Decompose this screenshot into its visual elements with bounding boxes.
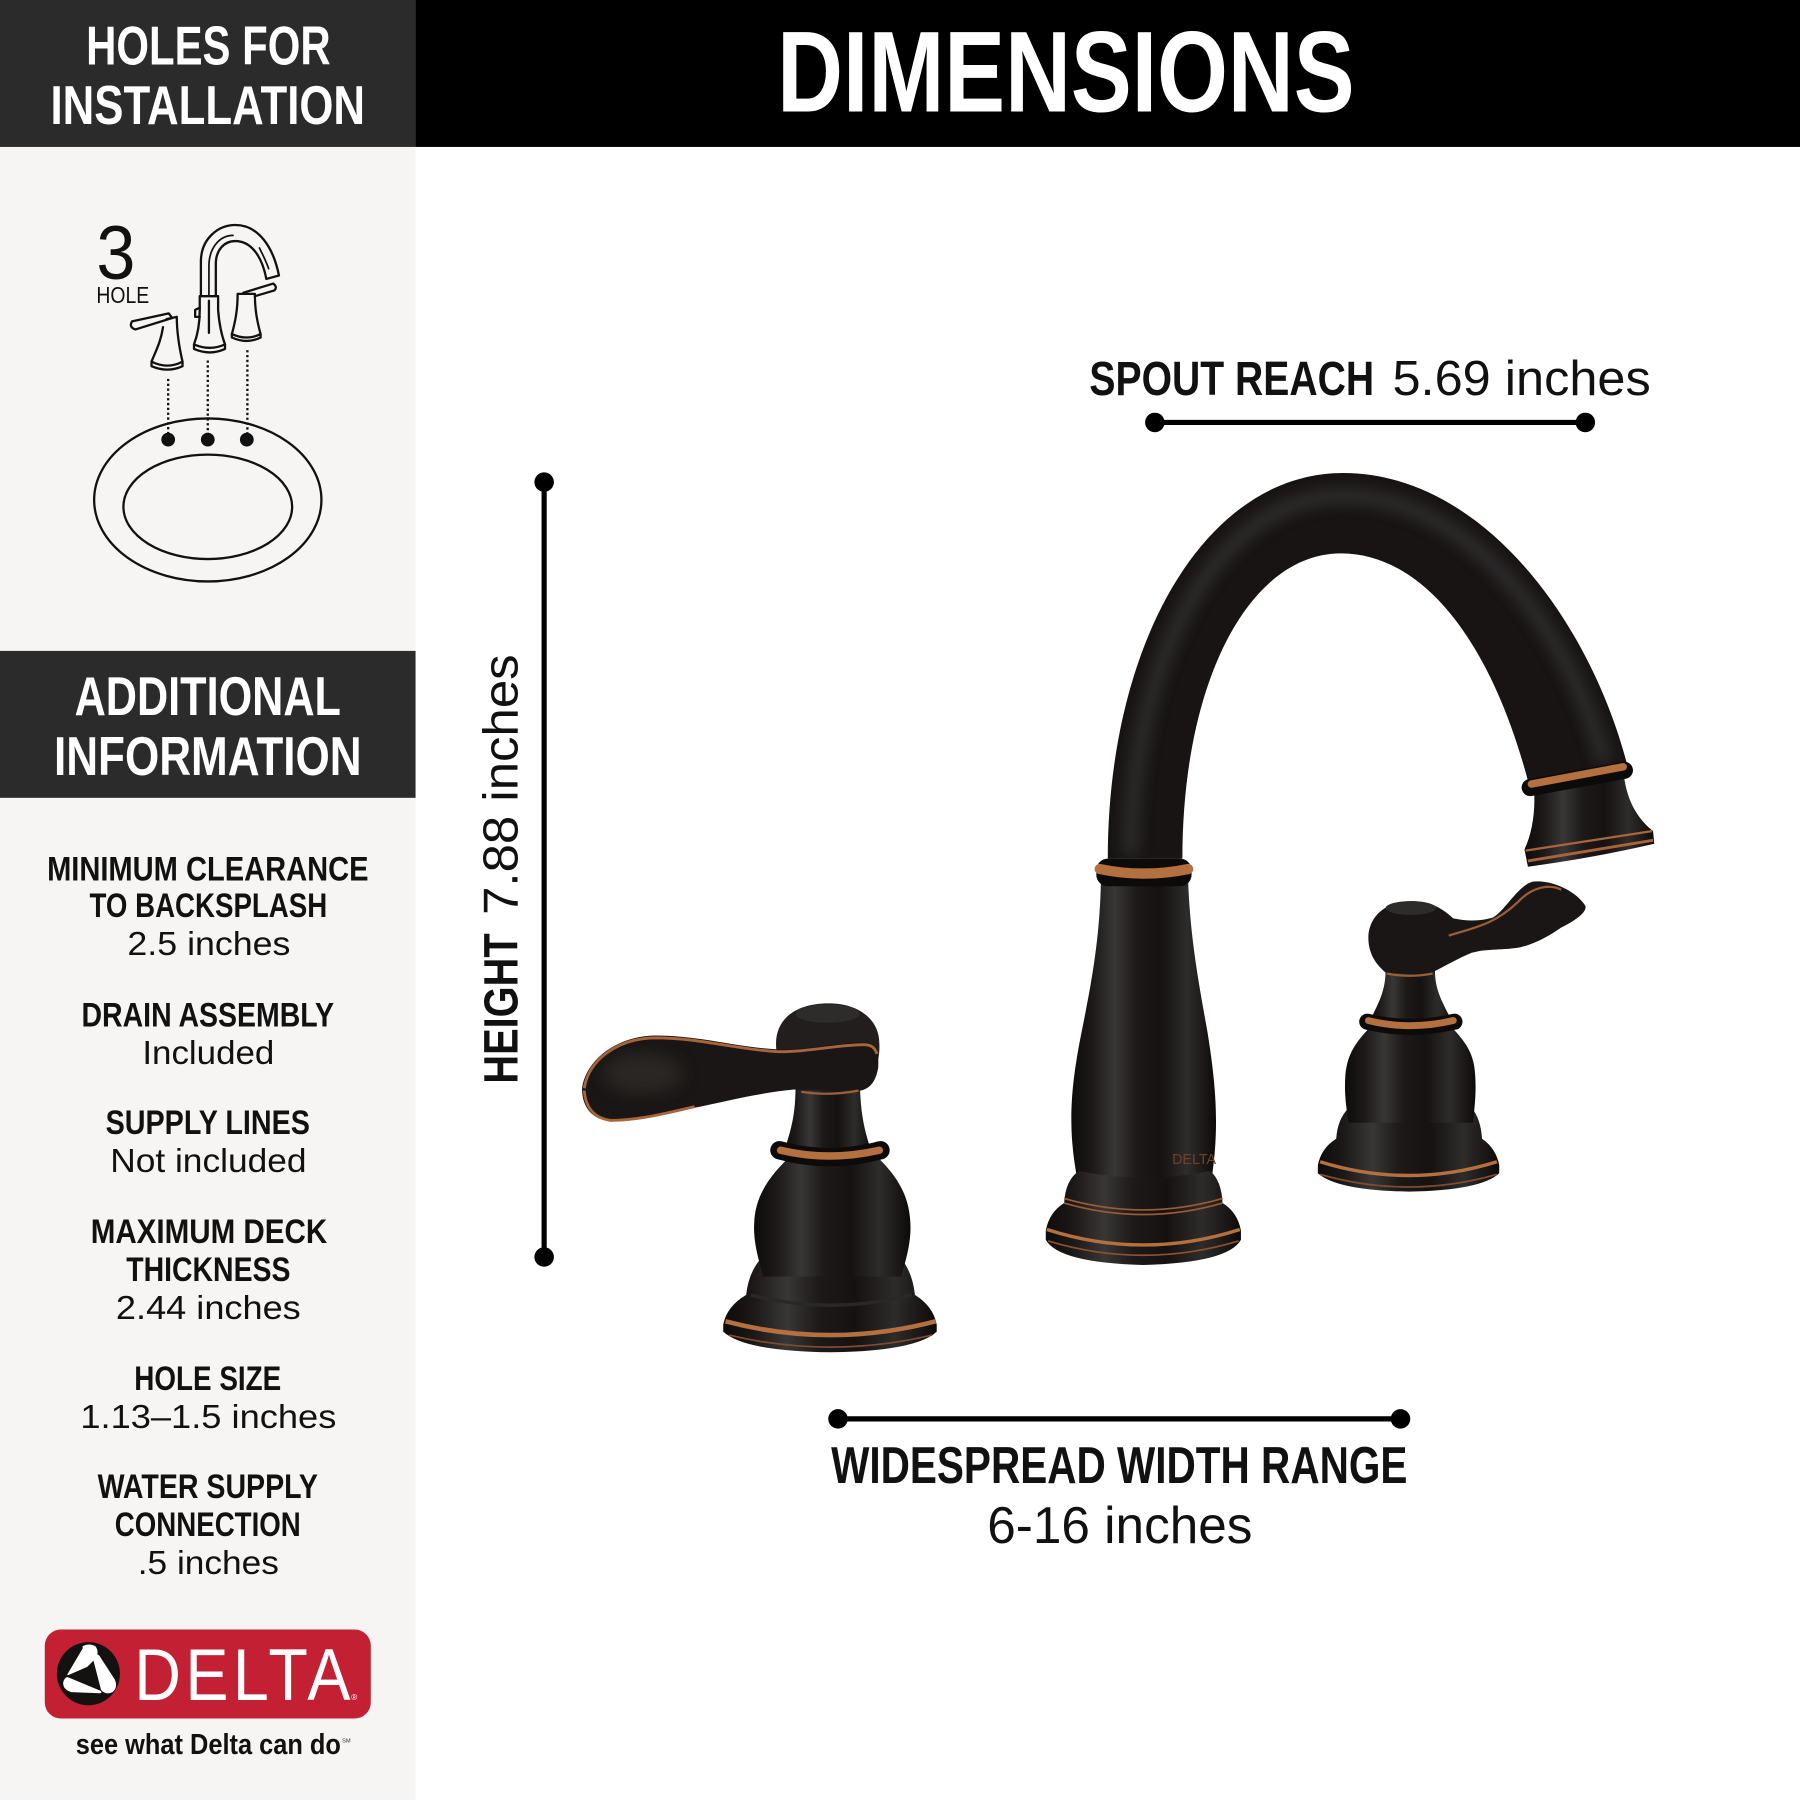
text block: maximum deck thickness <box>91 1213 327 1327</box>
title: dimensions: DIMENSIONS <box>777 8 1355 136</box>
faucet base: DELTA <box>1172 1152 1217 1168</box>
logo: Delta <box>45 1630 371 1761</box>
dimension: height: 7.88 inches <box>474 654 529 915</box>
text block: drain assembly <box>82 996 334 1072</box>
logo: Delta: DELTA <box>134 1633 351 1716</box>
text block: hole size: HOLE SIZE <box>134 1360 281 1398</box>
faucet base <box>1046 1152 1241 1265</box>
spout arch <box>1108 473 1628 859</box>
heading: additional information <box>0 651 416 798</box>
text block: minimum clearance: 2.5 inches <box>127 926 290 963</box>
dimension: spout reach: SPOUT REACH <box>1089 352 1374 406</box>
text block: minimum clearance: MINIMUM CLEARANCE <box>47 850 368 888</box>
faucet: left handle <box>582 1003 937 1352</box>
icon: three hole sink with faucet: HOLE <box>96 282 149 308</box>
dimension: widespread width range: 6-16 inches <box>987 1496 1252 1554</box>
faucet: spout and body <box>1046 473 1654 1265</box>
dimension: height <box>474 472 554 1267</box>
faucet: right handle <box>1318 881 1586 1192</box>
dimension: widespread width range: WIDESPREAD WIDTH RANGE <box>831 1436 1407 1494</box>
heading: additional information: ADDITIONAL <box>75 665 341 727</box>
text block: supply lines: Not included <box>110 1143 307 1180</box>
text block: drain assembly: DRAIN ASSEMBLY <box>82 996 334 1034</box>
text block: water supply connection <box>98 1468 318 1582</box>
text block: maximum deck thickness: 2.44 inches <box>116 1290 301 1327</box>
text block: water supply connection: .5 inches <box>138 1545 279 1582</box>
dimension: spout reach <box>1089 351 1651 432</box>
text block: maximum deck thickness: THICKNESS <box>126 1251 290 1289</box>
text block: minimum clearance <box>47 850 368 963</box>
text block: maximum deck thickness: MAXIMUM DECK <box>91 1213 327 1251</box>
icon: three hole sink with faucet <box>94 211 321 581</box>
dimension: widespread width range <box>828 1409 1410 1554</box>
heading: additional information: INFORMATION <box>54 725 362 787</box>
text block: drain assembly: Included <box>142 1035 274 1072</box>
text block: hole size: 1.13–1.5 inches <box>80 1399 336 1436</box>
text block: water supply connection: WATER SUPPLY <box>98 1468 318 1506</box>
logo: Delta: ® <box>351 1693 357 1702</box>
logo: Delta: SM <box>342 1739 351 1745</box>
text block: supply lines: SUPPLY LINES <box>106 1104 310 1142</box>
text block: supply lines <box>106 1104 310 1180</box>
heading: holes for installation: HOLES FOR <box>86 14 331 76</box>
dimension: spout reach: 5.69 inches <box>1392 351 1651 406</box>
panel: left sidebar <box>0 0 416 1800</box>
faucet body <box>1071 859 1216 1182</box>
title: dimensions <box>416 0 1800 147</box>
text block: water supply connection: CONNECTION <box>115 1506 301 1544</box>
text block: hole size <box>80 1360 336 1436</box>
text block: minimum clearance: TO BACKSPLASH <box>90 887 327 925</box>
heading: holes for installation <box>0 0 416 147</box>
dimension: height: HEIGHT <box>475 933 529 1084</box>
heading: holes for installation: INSTALLATION <box>51 74 365 136</box>
icon: three hole sink with faucet: 3 <box>96 211 135 296</box>
nozzle <box>1524 767 1654 867</box>
logo: Delta: see what Delta can do <box>76 1729 341 1761</box>
